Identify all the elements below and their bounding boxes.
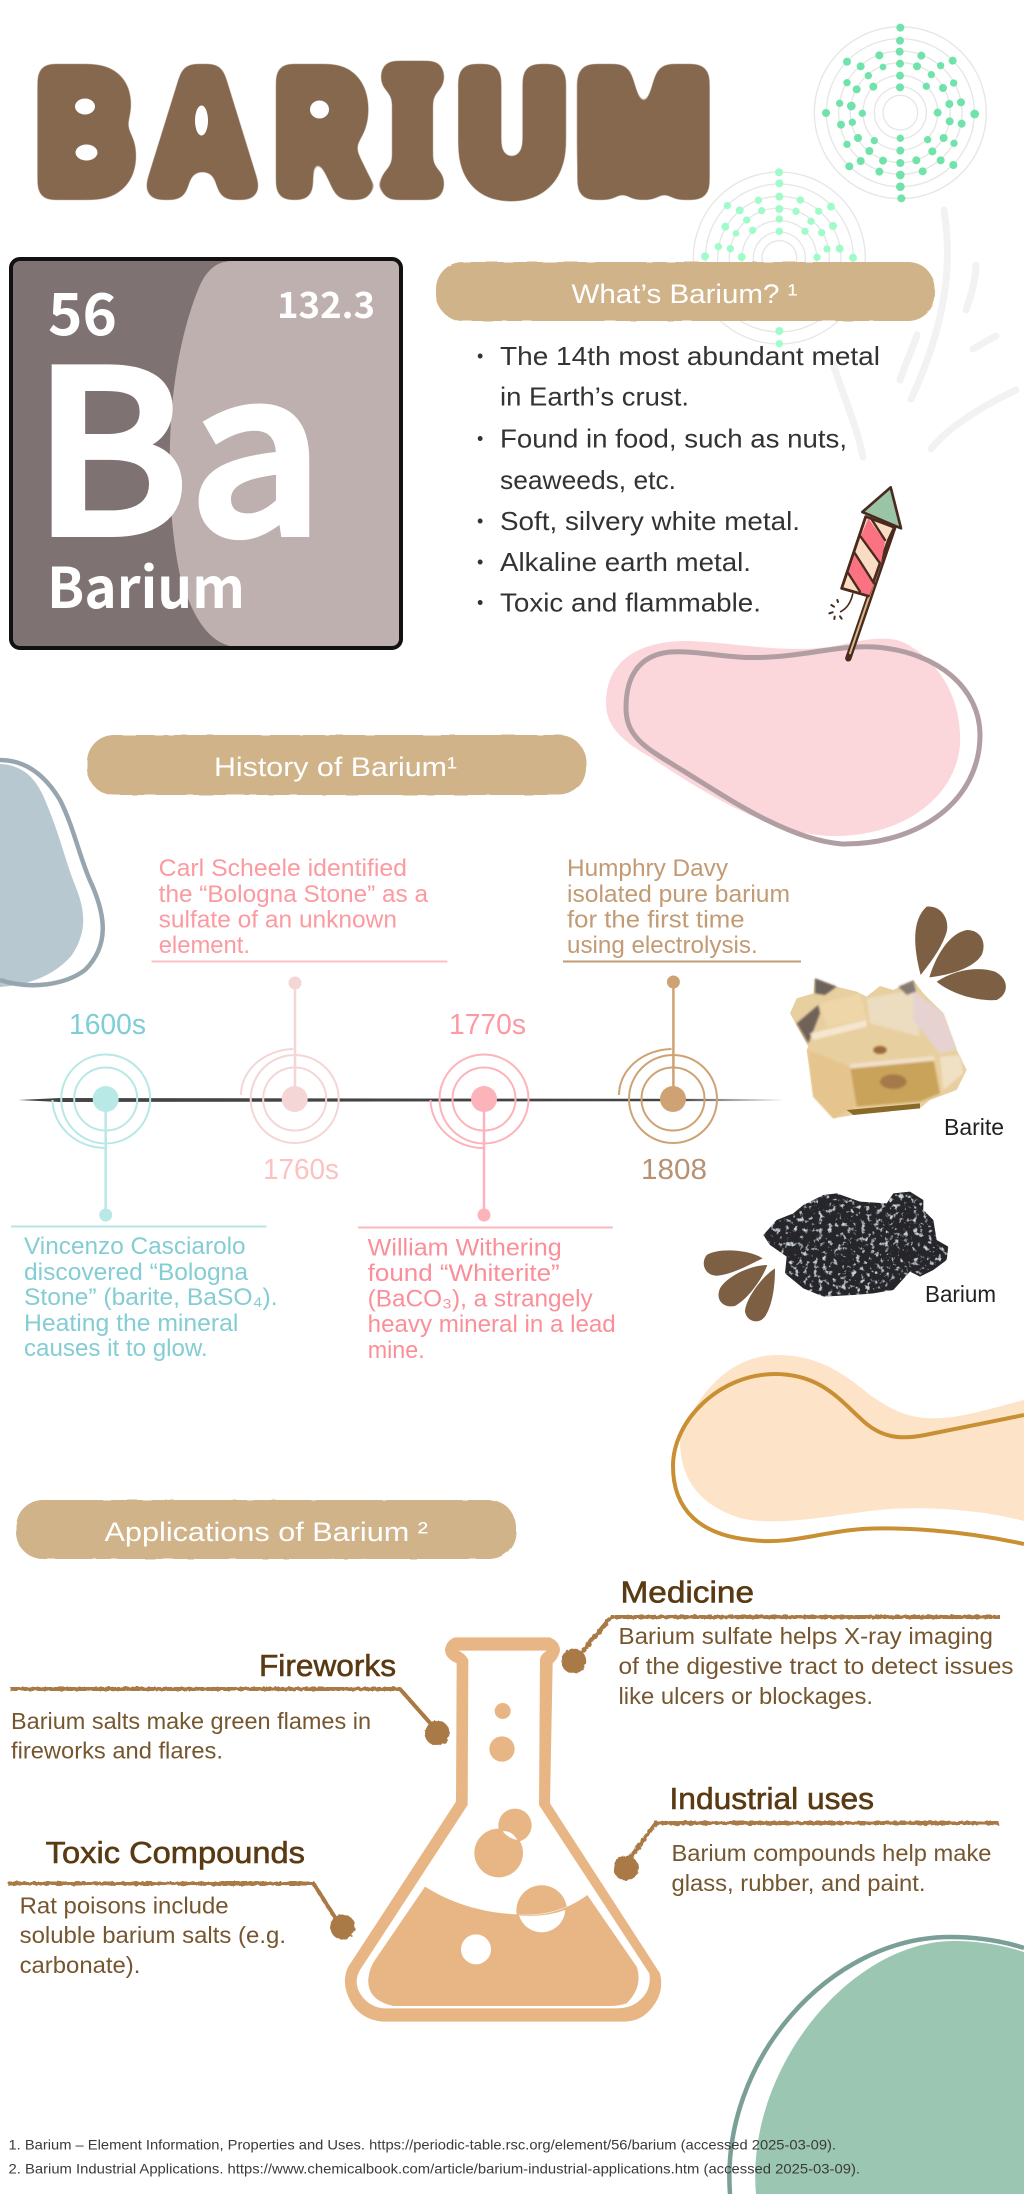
timeline text: 1760s: element. [159,932,250,959]
heading: What's Barium: What’s Barium? ¹ [572,279,798,309]
photo: barium metal [763,1192,948,1297]
timeline text: 1600s: Heating the mineral [24,1310,238,1337]
title [39,33,707,225]
references [8,2136,860,2177]
icon: rocket [829,487,901,658]
timeline node: 1600s: 1600s [69,1009,146,1041]
timeline text: 1760s: the “Bologna Stone” as a [159,881,429,908]
blob: pink [606,639,980,844]
callout: toxic compounds: Toxic Compounds [46,1835,305,1870]
callout: industrial uses: Barium compounds help make [672,1840,992,1866]
callout: fireworks [10,1648,450,1764]
heading: Applications of Barium: Applications of Barium ² [104,1517,428,1547]
firework swooshes [833,210,1016,457]
title: I [386,33,439,225]
timeline text: 1808: for the first time [567,906,745,934]
timeline text: 1760s [152,855,447,962]
atomic number: 56 [48,268,117,352]
title: M [580,43,707,222]
callout: industrial uses: glass, rubber, and paint. [672,1870,926,1896]
timeline node: 1770s: 1770s [449,1009,526,1041]
bullet list: what's barium: Found in food, such as nuts, [500,424,847,454]
timeline text: 1600s: discovered “Bologna [24,1259,249,1286]
timeline text: 1808: using electrolysis. [567,932,758,959]
timeline node: 1770s [430,1009,528,1222]
timeline text: 1760s: Carl Scheele identified [159,855,407,882]
callout: toxic compounds: Rat poisons include [20,1892,229,1918]
timeline node: 1600s [52,1009,150,1222]
callout: toxic compounds: soluble barium salts (e.g. [20,1922,286,1948]
blob: green [729,1937,1024,2194]
title: A [153,44,252,221]
timeline text: 1808 [563,855,801,962]
timeline text: 1760s: sulfate of an unknown [159,906,397,934]
bullet list: what's barium: Soft, silvery white metal. [500,506,800,536]
timeline node: 1808 [619,976,717,1186]
bullet list: what's barium [477,341,880,618]
atom diagram: behind header [693,168,865,347]
timeline text: 1808: isolated pure barium [567,881,790,908]
timeline text: 1770s: heavy mineral in a lead [368,1311,616,1338]
bullet list: what's barium: The 14th most abundant metal [500,341,880,371]
callout: medicine [561,1574,1014,1709]
timeline node: 1760s [241,976,339,1186]
title: B [39,42,132,221]
atom diagram: top right [814,24,986,202]
element symbol: Ba [32,273,324,600]
callout: toxic compounds [8,1835,355,1978]
element name: Barium [47,544,245,625]
references: 1. Barium – Element Information, Properties and Uses. https://periodic-table.rsc.org/element/56/barium (accessed 2025-03-09). [8,2136,836,2152]
callout: medicine: of the digestive tract to detect issues [618,1653,1014,1679]
bullet list: what's barium: • [477,552,483,572]
callout: industrial uses [614,1781,999,1896]
heading: Applications of Barium [16,1500,516,1559]
element card [11,259,401,648]
blob: peach [673,1355,1024,1544]
timeline text: 1808: Humphry Davy [567,855,728,882]
heading: What's Barium [436,262,935,321]
bullet list: what's barium: seaweeds, etc. [500,465,676,495]
bullet list: what's barium: • [477,511,483,531]
timeline node: 1808: 1808 [641,1154,707,1186]
bullet list: what's barium: • [477,592,483,612]
timeline axis [18,1098,785,1102]
callout: industrial uses: Industrial uses [670,1781,874,1816]
timeline text: 1770s [358,1228,616,1364]
callout: fireworks: Fireworks [259,1648,396,1683]
timeline node: 1760s: 1760s [263,1154,339,1186]
bullet list: what's barium: Alkaline earth metal. [500,547,751,577]
bullet list: what's barium: in Earth’s crust. [500,382,689,412]
icon: leaves top [915,907,1006,1000]
timeline text: 1600s [11,1226,278,1362]
heading: History of Barium: History of Barium¹ [214,752,457,782]
timeline text: 1600s: causes it to glow. [24,1335,208,1362]
bullet list: what's barium: • [477,346,483,366]
callout: fireworks: fireworks and flares. [11,1738,223,1764]
title: U [461,43,563,221]
callout: toxic compounds: carbonate). [20,1952,140,1978]
callout: fireworks: Barium salts make green flames in [11,1708,371,1734]
label: barite: Barite [944,1114,1004,1140]
timeline text: 1770s: found “Whiterite” [368,1260,560,1287]
references: 2. Barium Industrial Applications. https://www.chemicalbook.com/article/barium-industrial-applications.htm (accessed 2025-03-09). [8,2161,860,2177]
timeline text: 1600s: Stone” (barite, BaSO₄). [24,1284,278,1311]
timeline text: 1600s: Vincenzo Casciarolo [24,1233,246,1260]
atomic mass: 132.3 [277,277,375,329]
callout: medicine: Barium sulfate helps X-ray imaging [618,1623,993,1649]
bullet list: what's barium: Toxic and flammable. [500,588,761,618]
photo: barite crystal [790,978,967,1118]
label: barium: Barium [925,1281,996,1307]
blob: blue grey [0,760,103,987]
icon: leaves bottom [704,1250,775,1321]
timeline text: 1770s: mine. [368,1337,425,1364]
bullet list: what's barium: • [477,428,483,448]
heading: History of Barium [87,735,586,795]
timeline text: 1770s: William Withering [368,1235,562,1262]
icon: flask [345,1637,661,2022]
callout: medicine: like ulcers or blockages. [618,1683,873,1709]
title: R [278,43,365,222]
callout: medicine: Medicine [620,1574,754,1610]
timeline text: 1770s: (BaCO₃), a strangely [368,1286,593,1312]
